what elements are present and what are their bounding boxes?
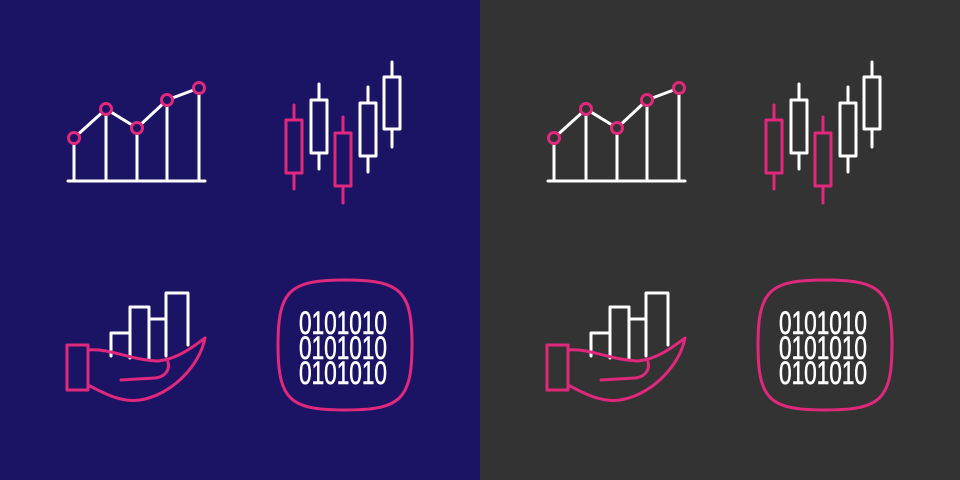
icon: binary code box: 0101010	[299, 305, 387, 341]
icon: binary code box: 0101010	[779, 305, 867, 341]
icon: candlesticks	[286, 62, 400, 203]
icon: binary code box: 0101010	[779, 330, 867, 366]
icon: binary code box	[278, 280, 412, 410]
panel: navy icons	[67, 62, 412, 410]
icon: line chart	[68, 82, 205, 181]
icon: binary code box	[758, 280, 892, 410]
icon: line chart	[548, 82, 685, 181]
icon: binary code box: 0101010	[299, 355, 387, 391]
icon: binary code box: 0101010	[299, 330, 387, 366]
panel: dark gray icons	[547, 62, 892, 410]
icon: binary code box: 0101010	[779, 355, 867, 391]
icon: hand with bar chart	[547, 293, 685, 401]
icon: candlesticks	[766, 62, 880, 203]
icon: hand with bar chart	[67, 293, 205, 401]
